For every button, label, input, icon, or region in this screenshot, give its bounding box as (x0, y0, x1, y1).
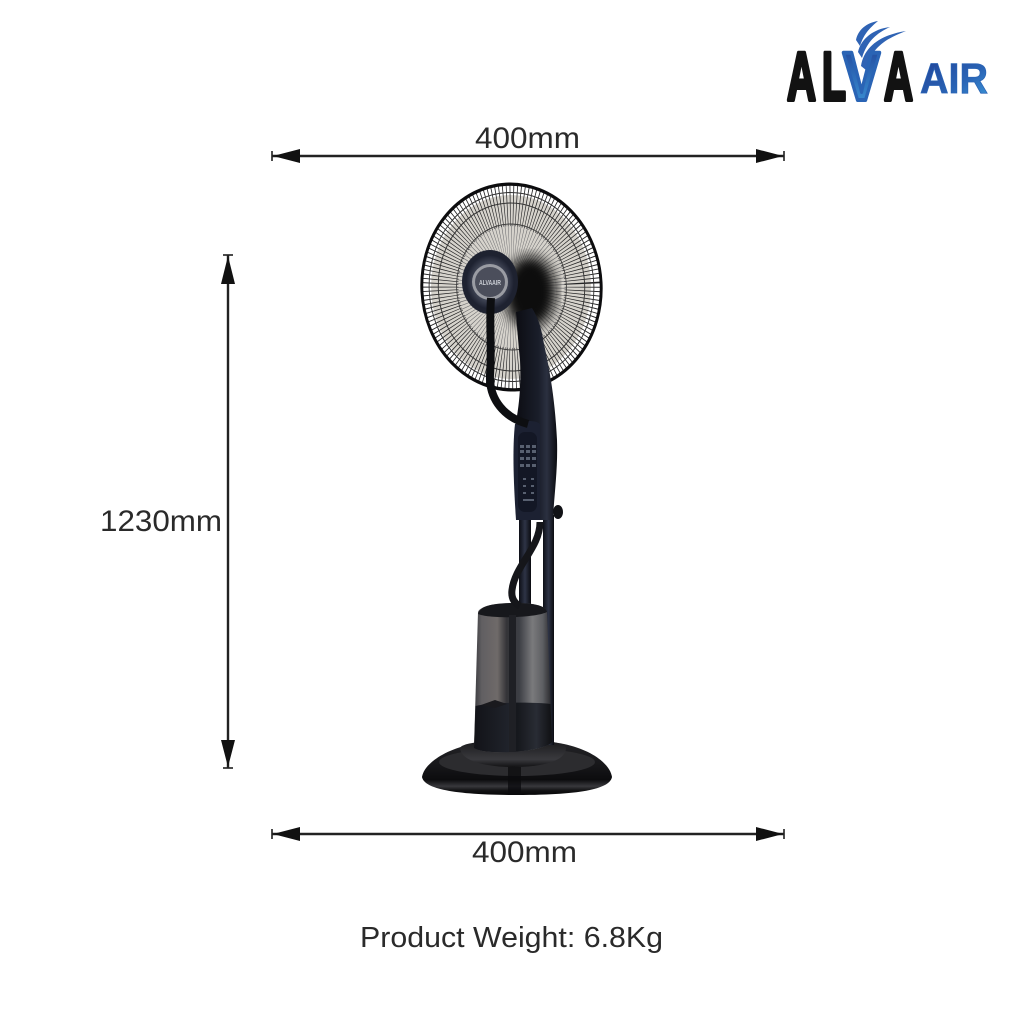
logo wordmark ALVA (787, 38, 913, 115)
fan grille blade disc (431, 195, 591, 379)
dimension: top width 400mm (272, 122, 784, 163)
dimension: bottom width 400mm: 400mm (472, 836, 577, 869)
adjustment knob (553, 505, 563, 519)
lower mist hose (512, 522, 540, 606)
logo wordmark ALVA: L (822, 38, 846, 115)
logo icon: blue wing swoosh (856, 21, 906, 70)
shadow of motor behind grille (504, 256, 556, 328)
logo wordmark ALVA: V (843, 38, 880, 115)
logo wordmark ALVA: A (787, 38, 816, 115)
dimension: height 1230mm: 1230mm (100, 505, 222, 538)
neck and main column (516, 308, 557, 520)
dimension: height 1230mm (100, 255, 235, 768)
logo wordmark ALVA: A (884, 38, 913, 115)
water tank (474, 603, 552, 752)
fan grille (417, 180, 606, 394)
upper mist hose (490, 298, 528, 424)
misting fan product (417, 180, 612, 795)
dimension: top width 400mm: 400mm (475, 122, 580, 155)
dimension: bottom width 400mm (272, 827, 784, 869)
motor hub (462, 250, 518, 314)
base (422, 740, 612, 795)
logo: Alva Air (787, 21, 988, 115)
rear pole (543, 515, 554, 745)
front pole (519, 515, 531, 610)
control panel (513, 421, 540, 520)
product weight: Product Weight: 6.8Kg (360, 922, 663, 954)
logo wordmark AIR: AIR (920, 55, 988, 103)
hub logo: ALVAAIR (479, 280, 501, 287)
